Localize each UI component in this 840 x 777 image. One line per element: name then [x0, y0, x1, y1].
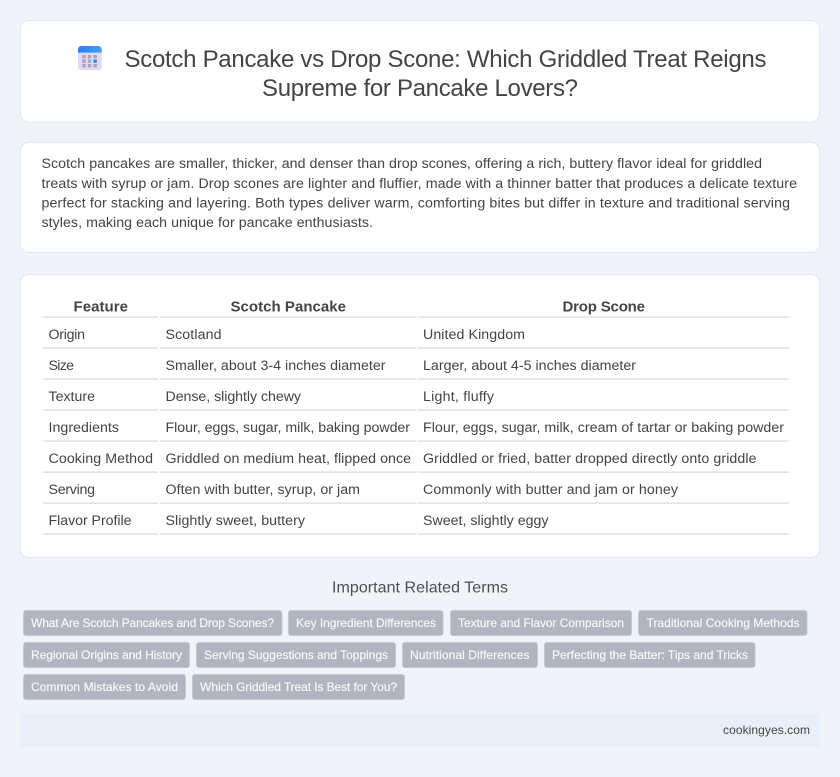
table header [74, 298, 645, 316]
table row: cooking method: Griddled on medium heat, flipped once [166, 451, 411, 467]
table row: origin: Origin [48, 327, 85, 343]
footer [20, 713, 820, 747]
tag [638, 610, 807, 636]
text block: introduction: Scotch pancakes are smaller, thicker, and denser than drop scones, offering a rich, buttery flavor ideal for griddled [42, 156, 762, 172]
table row: ingredients [48, 420, 784, 436]
table row: cooking method: Cooking Method [48, 451, 153, 467]
table row: size: Larger, about 4-5 inches diameter [423, 358, 636, 374]
table row: flavor profile [48, 513, 549, 529]
tag [24, 642, 190, 668]
title: Scotch Pancake vs Drop Scone: Which Griddled Treat Reigns [124, 46, 766, 73]
table row: serving: Often with butter, syrup, or jam [166, 482, 360, 498]
table row: texture: Light, fluffy [423, 389, 495, 405]
table row: ingredients: Flour, eggs, sugar, milk, baking powder [166, 420, 410, 436]
title [124, 46, 766, 102]
tag: Regional Origins and History [31, 648, 182, 662]
tag: Key Ingredient Differences [296, 616, 436, 630]
table row: ingredients: Flour, eggs, sugar, milk, cream of tartar or baking powder [423, 420, 784, 436]
tag: Nutritional Differences [410, 648, 530, 662]
table header: Scotch Pancake [230, 298, 346, 316]
table row: origin [48, 327, 525, 343]
tag: Perfecting the Batter: Tips and Tricks [552, 648, 748, 662]
table row: texture [48, 389, 495, 405]
table row: texture: Texture [48, 389, 95, 405]
table row: origin: Scotland [166, 327, 222, 343]
tag [450, 610, 632, 636]
tag [544, 642, 755, 668]
table row: size: Smaller, about 3-4 inches diameter [166, 358, 386, 374]
text block: introduction: perfect for stacking and layering. Both types deliver warm, comforting bites but differ in texture and traditional serving [42, 196, 790, 212]
panel: introduction [20, 142, 820, 252]
table header: Drop Scone [562, 298, 645, 316]
table row: size: Size [48, 358, 74, 374]
tag: Which Griddled Treat Is Best for You? [200, 680, 397, 694]
table row: cooking method [48, 451, 757, 467]
table row: flavor profile: Flavor Profile [48, 513, 132, 529]
table row: ingredients: Ingredients [48, 420, 119, 436]
table row: cooking method: Griddled or fried, batter dropped directly onto griddle [423, 451, 757, 467]
table row: origin: United Kingdom [423, 327, 525, 343]
text block: introduction: treats with syrup or jam. Drop scones are lighter and fluffier, made with a thinner batter that produces a delicate texture [42, 176, 797, 192]
tag [24, 674, 186, 700]
tag [402, 642, 538, 668]
tag [288, 610, 443, 636]
panel: header [20, 20, 820, 122]
heading: important related terms: Important Related Terms [332, 580, 508, 597]
table row: texture: Dense, slightly chewy [166, 389, 302, 405]
table row: flavor profile: Sweet, slightly eggy [423, 513, 549, 529]
tag [24, 610, 282, 636]
tag: Serving Suggestions and Toppings [204, 648, 388, 662]
table header: Feature [74, 298, 128, 316]
table row: flavor profile: Slightly sweet, buttery [166, 513, 306, 529]
text block: introduction: styles, making each unique for pancake enthusiasts. [42, 215, 373, 231]
panel: comparison table [20, 274, 820, 558]
text block: introduction [42, 156, 797, 231]
tag: Common Mistakes to Avoid [31, 680, 178, 694]
tag: What Are Scotch Pancakes and Drop Scones? [31, 616, 274, 630]
table row: serving [48, 482, 679, 498]
table row: serving: Commonly with butter and jam or honey [423, 482, 679, 498]
tag: Texture and Flavor Comparison [458, 616, 624, 630]
tag [196, 642, 396, 668]
table row: serving: Serving [48, 482, 95, 498]
title: Supreme for Pancake Lovers? [262, 75, 578, 102]
icon: calendar [78, 46, 102, 70]
tag: Traditional Cooking Methods [646, 616, 800, 630]
related term tags [24, 610, 807, 700]
tag [192, 674, 404, 700]
table row: size [48, 358, 636, 374]
footer source text: cookingyes.com [723, 723, 810, 737]
